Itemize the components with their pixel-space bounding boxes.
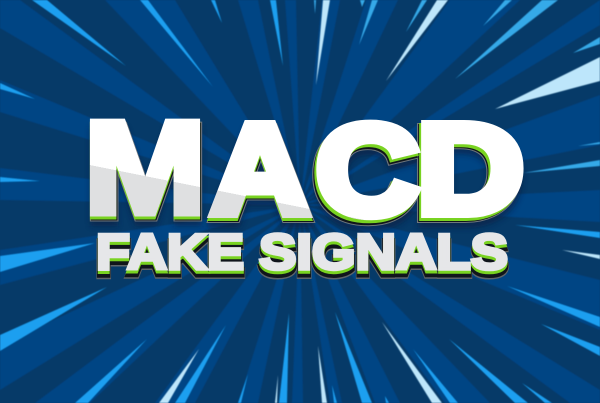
subtitle dark edge xyxy=(96,230,508,286)
MACD white face: M xyxy=(84,94,206,241)
soft shadow under MACD: A xyxy=(212,107,310,250)
MACD green bevel: A xyxy=(211,101,309,244)
MACD white face: C xyxy=(316,99,419,242)
MACD extrusion rim: C xyxy=(313,104,416,247)
MACD green bevel: D xyxy=(415,101,522,244)
MACD green bevel xyxy=(84,97,522,245)
soft shadow under MACD: M xyxy=(85,103,207,250)
subtitle extrusion: SIGNALS xyxy=(259,231,508,287)
subtitle extrusion: FAKE xyxy=(96,231,244,287)
MACD green bevel: M xyxy=(84,97,206,244)
subtitle green bevel: FAKE xyxy=(96,227,244,283)
soft shadow under MACD: D xyxy=(415,107,522,250)
MACD white face: D xyxy=(417,98,524,241)
spikes: pale blue xyxy=(159,0,600,403)
MACD dark edge: A xyxy=(212,102,310,245)
MACD extrusion rim: A xyxy=(212,102,310,245)
subtitle green bevel xyxy=(96,227,508,283)
MACD dark edge: D xyxy=(414,102,521,245)
subtitle dark edge: FAKE xyxy=(96,230,244,286)
subtitle dark edge: SIGNALS xyxy=(259,230,508,286)
subtitle pale face xyxy=(96,224,508,280)
MACD dark edge xyxy=(85,98,521,247)
spikes: mid blue xyxy=(314,0,600,173)
subtitle: FAKE SIGNALS xyxy=(96,224,508,287)
title: MACD xyxy=(84,94,524,252)
MACD white face: A xyxy=(211,98,309,241)
MACD white face xyxy=(84,94,524,242)
MACD extrusion rim: M xyxy=(85,98,207,245)
MACD extrusion rim xyxy=(85,98,521,247)
subtitle pale face: FAKE xyxy=(96,224,244,280)
MACD green bevel: C xyxy=(314,102,417,245)
subtitle pale face: SIGNALS xyxy=(259,224,508,280)
subtitle extrusion xyxy=(96,231,508,287)
MACD extrusion rim: D xyxy=(414,102,521,245)
subtitle green bevel: SIGNALS xyxy=(259,227,508,283)
soft shadow under MACD xyxy=(85,103,522,252)
MACD dark edge: C xyxy=(313,104,416,247)
MACD dark edge: M xyxy=(85,98,207,245)
soft shadow under MACD: C xyxy=(314,109,417,252)
